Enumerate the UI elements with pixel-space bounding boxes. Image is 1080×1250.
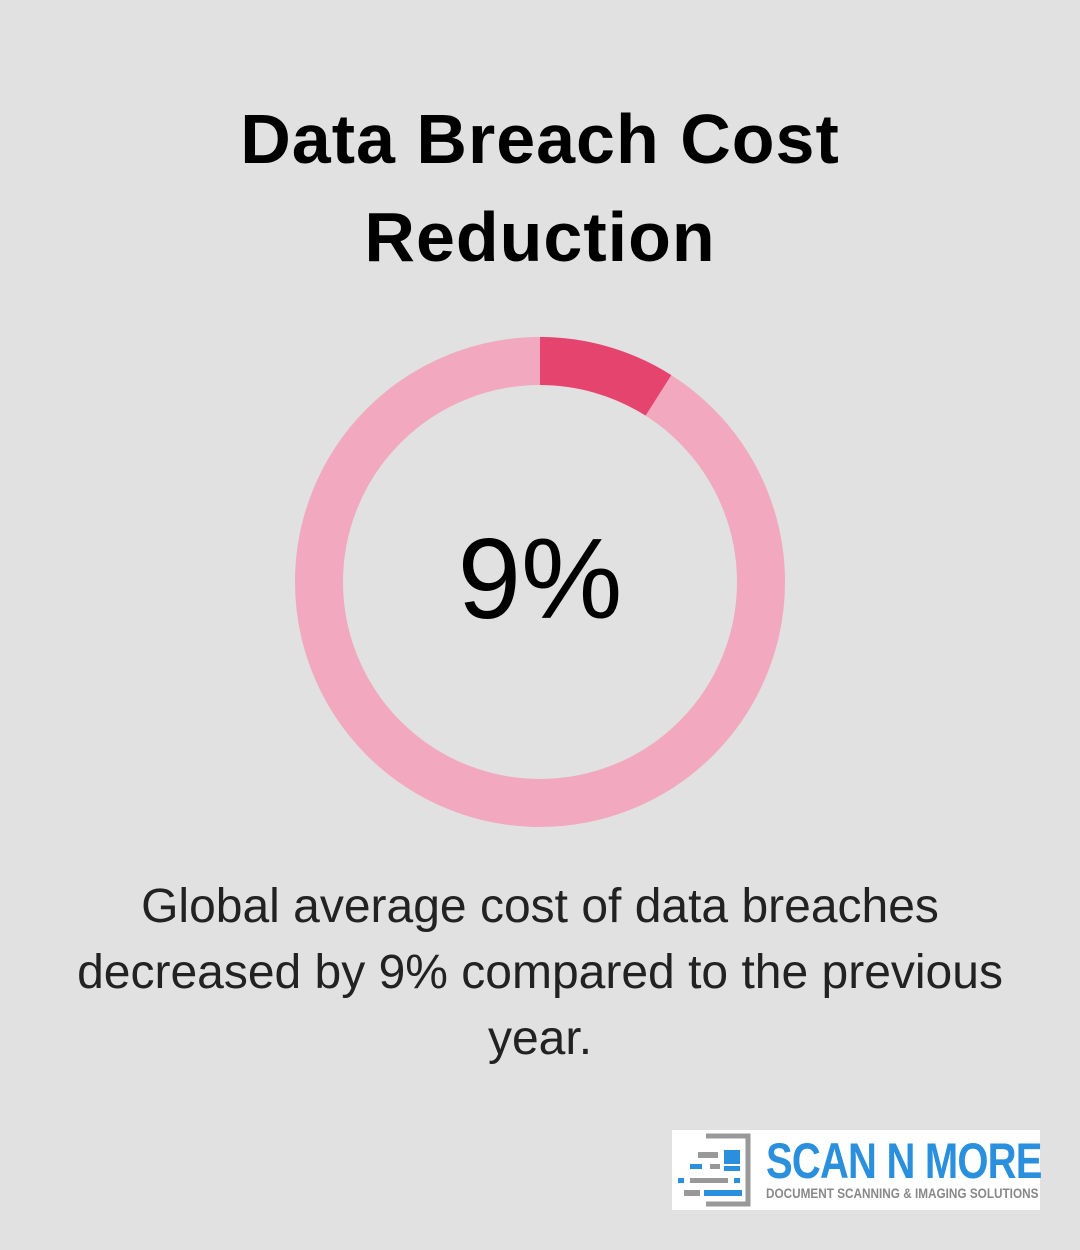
logo (672, 1130, 1040, 1210)
description: year. (488, 1012, 592, 1065)
description: decreased by 9% compared to the previous (77, 946, 1003, 999)
donut chart (295, 337, 785, 827)
title (240, 100, 840, 276)
donut chart: 9% (458, 516, 622, 643)
logo: SCAN N MORE (766, 1133, 1042, 1189)
description: Global average cost of data breaches (141, 880, 939, 933)
icon: scanner (678, 1134, 750, 1206)
title: Data Breach Cost (240, 100, 840, 178)
description (77, 880, 1003, 1065)
logo: DOCUMENT SCANNING & IMAGING SOLUTIONS (766, 1185, 1038, 1201)
title: Reduction (364, 198, 716, 276)
